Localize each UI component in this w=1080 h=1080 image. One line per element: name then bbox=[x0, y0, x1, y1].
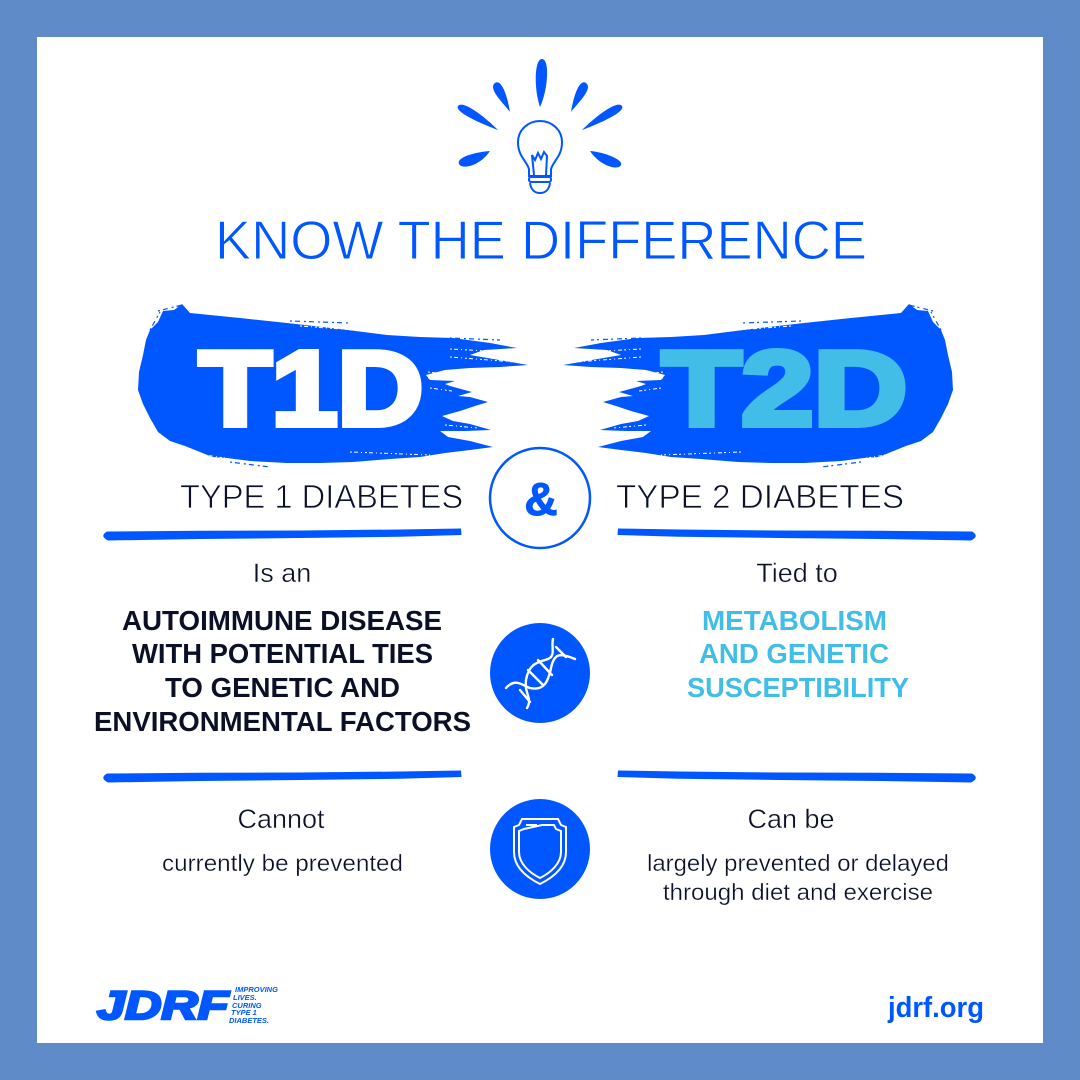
ampersand badge: & bbox=[524, 473, 558, 525]
icon: light bulb with rays bbox=[458, 59, 622, 193]
T1D cause description: TO GENETIC AND bbox=[165, 672, 400, 703]
title: KNOW THE DIFFERENCE bbox=[215, 210, 867, 271]
T1D brush badge: T1D bbox=[199, 329, 423, 448]
T2D prevention detail bbox=[647, 850, 949, 905]
T2D cause heading: Tied to bbox=[756, 558, 838, 588]
T2D cause description: AND GENETIC bbox=[699, 638, 889, 669]
T1D prevention heading: Cannot bbox=[237, 804, 325, 834]
T1D subtitle: TYPE 1 DIABETES bbox=[180, 478, 463, 515]
icon: DNA bbox=[490, 623, 590, 723]
T1D prevention detail: currently be prevented bbox=[162, 850, 403, 876]
T1D cause description: AUTOIMMUNE DISEASE bbox=[122, 605, 442, 636]
JDRF logo: IMPROVING bbox=[235, 985, 278, 994]
T2D prevention detail: through diet and exercise bbox=[663, 879, 933, 905]
T1D cause description bbox=[94, 605, 471, 737]
JDRF logo: DIABETES. bbox=[229, 1016, 269, 1025]
T2D brush badge: T2D bbox=[662, 330, 907, 448]
website link: jdrf.org bbox=[887, 992, 984, 1024]
icon: shield bbox=[490, 799, 590, 899]
T2D prevention detail: largely prevented or delayed bbox=[647, 850, 949, 876]
T2D cause description bbox=[687, 605, 909, 703]
T2D cause description: METABOLISM bbox=[702, 605, 887, 636]
JDRF logo: JDRF bbox=[97, 983, 230, 1028]
JDRF logo: LIVES. bbox=[233, 993, 257, 1002]
ampersand badge bbox=[490, 448, 590, 548]
T1D cause heading: Is an bbox=[253, 558, 311, 588]
T2D cause description: SUSCEPTIBILITY bbox=[687, 672, 909, 703]
T1D brush badge bbox=[138, 304, 528, 467]
T1D cause description: ENVIRONMENTAL FACTORS bbox=[94, 706, 471, 737]
T1D cause description: WITH POTENTIAL TIES bbox=[132, 638, 433, 669]
JDRF logo: TYPE 1 bbox=[231, 1008, 257, 1017]
T2D prevention heading: Can be bbox=[747, 804, 835, 834]
JDRF logo: CURING bbox=[232, 1001, 262, 1010]
T2D brush badge bbox=[563, 304, 953, 467]
T2D subtitle: TYPE 2 DIABETES bbox=[616, 479, 904, 516]
